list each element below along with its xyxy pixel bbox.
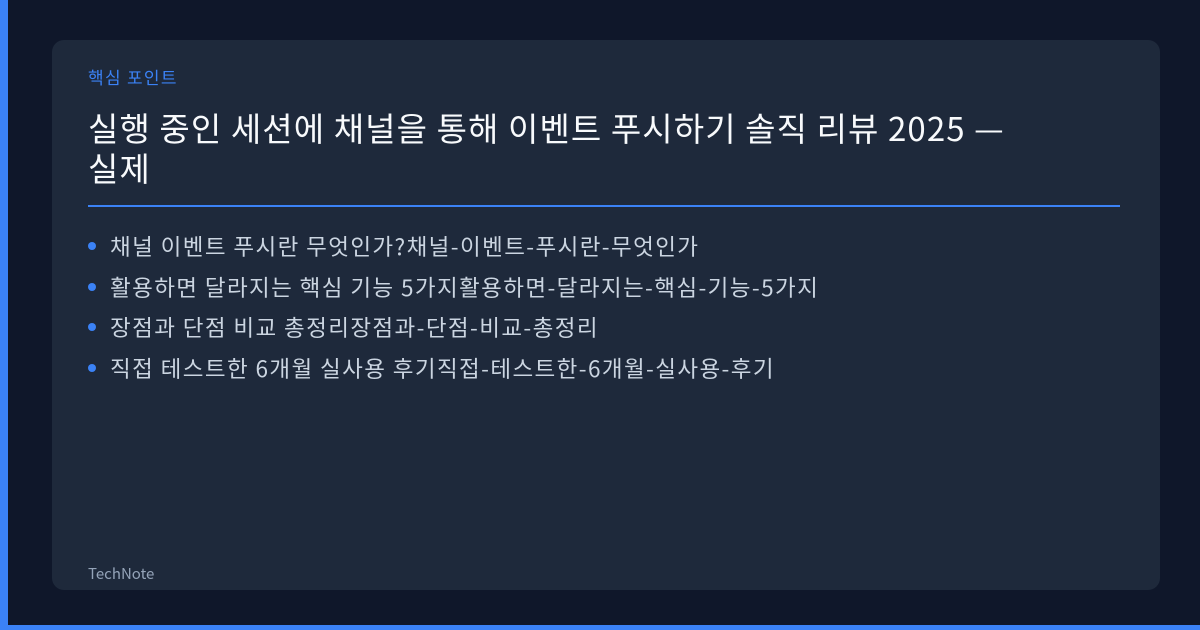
bullet 2: 활용하면 달라지는 핵심 기능 5가지활용하면-달라지는-핵심-기능-5가지 bbox=[110, 270, 819, 302]
title: 실행 중인 세션에 채널을 통해 이벤트 푸시하기 솔직 리뷰 2025 — bbox=[88, 103, 1005, 151]
footer brand: TechNote bbox=[88, 563, 154, 584]
kicker label: 핵심 포인트 bbox=[88, 64, 178, 89]
bullet list bbox=[88, 230, 819, 384]
bullet 1: 채널 이벤트 푸시란 무엇인가?채널-이벤트-푸시란-무엇인가 bbox=[110, 230, 699, 262]
bullet 4: 직접 테스트한 6개월 실사용 후기직접-테스트한-6개월-실사용-후기 bbox=[110, 352, 775, 384]
title: 실제 bbox=[88, 143, 151, 191]
title bbox=[88, 103, 1005, 191]
bullet 3: 장점과 단점 비교 총정리장점과-단점-비교-총정리 bbox=[110, 311, 599, 343]
